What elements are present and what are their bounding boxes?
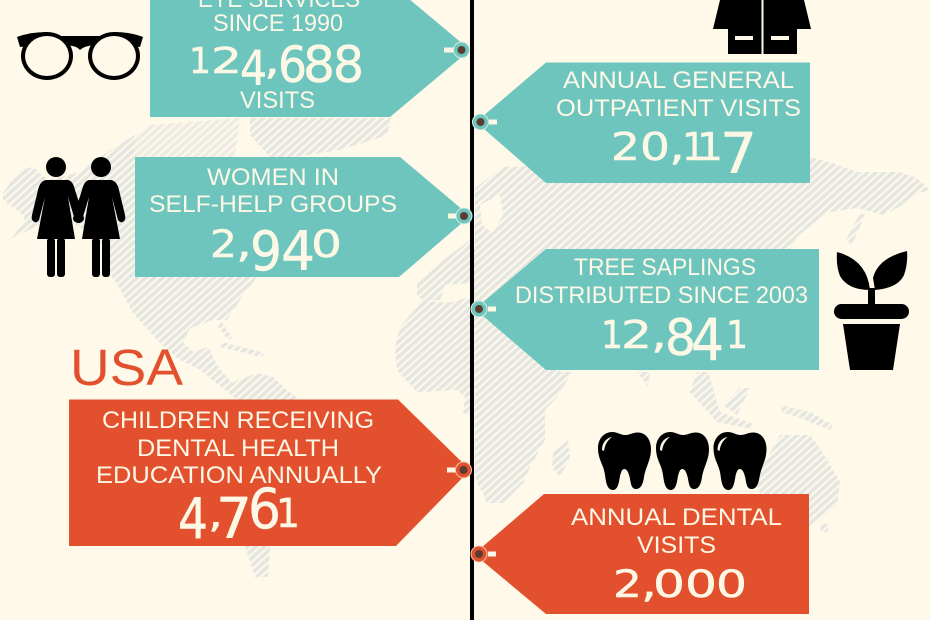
tag: eye services: 6 xyxy=(278,36,307,94)
tag: outpatient visits: 1 xyxy=(697,125,723,169)
tag: eye services: VISITS xyxy=(240,87,315,114)
map inland sea gap xyxy=(480,195,503,233)
connector dot: outpatient xyxy=(472,114,497,130)
icon: doctor coat xyxy=(713,0,811,54)
connector dot: women xyxy=(448,208,472,224)
tag: children dental education: EDUCATION ANNUALLY xyxy=(96,462,382,489)
tag: tree saplings: , xyxy=(651,312,667,358)
tag: children dental education xyxy=(69,400,470,552)
tag: outpatient visits: 0 xyxy=(640,125,670,169)
tag: eye services: 4 xyxy=(240,41,267,97)
tag: tree saplings: 2 xyxy=(621,313,652,357)
tag: annual dental visits xyxy=(474,494,809,614)
tag: eye services xyxy=(150,0,470,117)
tag: tree saplings: 1 xyxy=(601,313,623,357)
tag: children dental education: 4 xyxy=(178,487,208,552)
tag: women in self-help groups: 2 xyxy=(210,223,237,266)
tag: outpatient visits: , xyxy=(669,124,685,170)
tag: eye services: 8 xyxy=(303,36,335,94)
tag: women in self-help groups: , xyxy=(236,221,252,267)
tag: outpatient visits: 1 xyxy=(682,125,706,169)
tag: annual dental visits: VISITS xyxy=(637,532,716,559)
tag: eye services: 1 xyxy=(189,41,211,82)
connector dot: annual dental xyxy=(471,546,496,562)
tag: eye services: 2 xyxy=(211,41,242,82)
icon: potted plant xyxy=(834,251,909,370)
tag: women in self-help groups xyxy=(135,157,470,283)
tag: outpatient visits: OUTPATIENT VISITS xyxy=(556,95,801,122)
tag: children dental education: , xyxy=(208,492,223,536)
tag: tree saplings xyxy=(475,249,819,374)
tag: women in self-help groups: 0 xyxy=(311,223,342,266)
icon: two women holding hands xyxy=(32,157,125,277)
centre timeline line xyxy=(470,0,474,620)
tag: outpatient visits: 7 xyxy=(720,122,757,187)
tag: women in self-help groups: WOMEN IN xyxy=(207,164,339,191)
tag: eye services: SINCE 1990 xyxy=(213,10,343,37)
tag: outpatient visits: ANNUAL GENERAL xyxy=(563,67,794,94)
icon: glasses xyxy=(17,32,143,80)
heading: USA: USA xyxy=(70,339,183,396)
tag: tree saplings: DISTRIBUTED SINCE 2003 xyxy=(515,282,808,309)
connector dot: eye services xyxy=(444,42,470,58)
tag: tree saplings: 8 xyxy=(665,309,696,367)
tag: annual dental visits: 2 xyxy=(613,563,642,606)
connector dot: tree saplings xyxy=(471,301,496,317)
tag: eye services: , xyxy=(264,38,280,84)
tag: annual dental visits: 0 xyxy=(716,563,747,606)
connector dot: children dental xyxy=(447,462,472,478)
icon: three teeth xyxy=(598,432,766,490)
tag: annual dental visits: 0 xyxy=(685,563,717,606)
tag: outpatient visits: 2 xyxy=(611,125,640,169)
tag: women in self-help groups: 4 xyxy=(281,220,315,283)
tag: children dental education: CHILDREN RECEIVING xyxy=(102,407,374,434)
tag: children dental education: 1 xyxy=(276,491,300,537)
world map background xyxy=(3,118,930,577)
tag: annual dental visits: 0 xyxy=(653,563,685,606)
tag: tree saplings: 4 xyxy=(691,306,724,374)
tag: tree saplings: 1 xyxy=(726,313,748,357)
tag: children dental education: 7 xyxy=(216,487,252,552)
tag: outpatient visits xyxy=(476,62,810,187)
tag: children dental education: DENTAL HEALTH xyxy=(137,435,339,462)
tag: annual dental visits: ANNUAL DENTAL xyxy=(571,504,782,531)
tag: children dental education: 6 xyxy=(248,477,281,541)
tag: women in self-help groups: 9 xyxy=(250,220,282,283)
tag: tree saplings: TREE SAPLINGS xyxy=(574,254,756,281)
tag: eye services: 8 xyxy=(333,36,364,94)
tag: women in self-help groups: SELF-HELP GROUPS xyxy=(149,191,397,218)
tag: annual dental visits: , xyxy=(641,561,657,607)
